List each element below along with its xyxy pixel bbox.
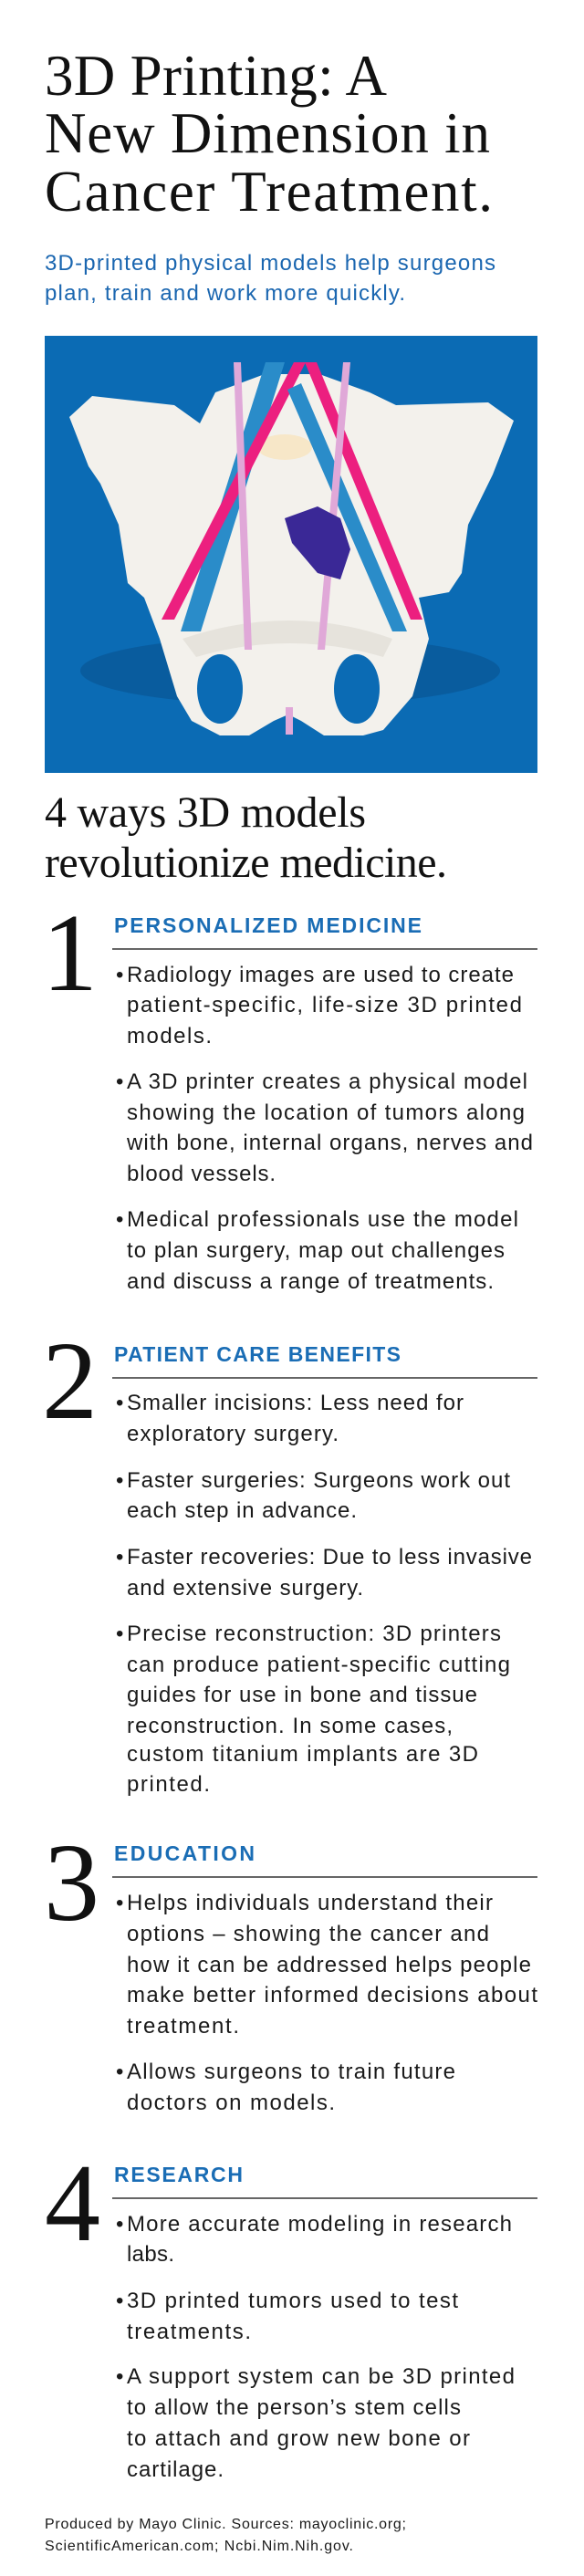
bullets 2: [116, 1391, 532, 1797]
number 4: 4: [45, 2142, 100, 2265]
bullets 1: •: [116, 1207, 123, 1232]
bullets 4: •: [116, 2212, 123, 2237]
footer: sources: ScientificAmerican.com; Ncbi.Nim.Nih.gov.: [45, 2539, 353, 2554]
bullets 2: each step in advance.: [127, 1498, 357, 1523]
subtitle: plan, train and work more quickly.: [45, 281, 405, 306]
bullets 1: A 3D printer creates a physical model: [127, 1069, 527, 1094]
section 2: patient care benefits: [42, 1319, 537, 1797]
bullets 4: treatments.: [127, 2320, 251, 2344]
bullets 2: Faster surgeries: Surgeons work out: [127, 1468, 510, 1493]
bullets 4: to allow the person’s stem cells: [127, 2395, 461, 2420]
number 2: 2: [42, 1319, 98, 1443]
bullets 1: to plan surgery, map out challenges: [127, 1238, 505, 1263]
bullets 2: custom titanium implants are 3D: [127, 1742, 478, 1767]
title: [45, 44, 493, 224]
bullets 4: More accurate modeling in research: [127, 2212, 512, 2237]
bullets 3: how it can be addressed helps people: [127, 1953, 531, 1977]
bullets 2: Faster recoveries: Due to less invasive: [127, 1545, 532, 1570]
bullets 1: Medical professionals use the model: [127, 1207, 518, 1232]
section 4: research: [45, 2142, 537, 2482]
bullets 2: Precise reconstruction: 3D printers: [127, 1622, 501, 1646]
section heading: [45, 788, 447, 887]
bullets 3: Helps individuals understand their: [127, 1891, 493, 1915]
section heading: revolutionize medicine.: [45, 839, 447, 887]
vessels: [181, 362, 285, 631]
bullets 4: •: [116, 2364, 123, 2389]
subtitle: [45, 251, 495, 306]
section 1: personalized medicine: [42, 892, 537, 1294]
section heading: 4 ways 3D models: [45, 788, 366, 837]
bullets 4: 3D printed tumors used to test: [127, 2289, 458, 2313]
bullets 2: reconstruction. In some cases,: [127, 1714, 453, 1738]
bullets 1: and discuss a range of treatments.: [127, 1269, 494, 1294]
bullets 4: to attach and grow new bone or: [127, 2426, 470, 2451]
photo: 3D printed pelvis model: [45, 336, 537, 773]
footer: sources: Produced by Mayo Clinic. Sources: mayoclinic.org;: [45, 2517, 406, 2532]
bullets 2: •: [116, 1391, 123, 1415]
bullets 2: •: [116, 1468, 123, 1493]
bullets 1: •: [116, 1069, 123, 1094]
bullets 1: •: [116, 963, 123, 987]
bullets 2: Smaller incisions: Less need for: [127, 1391, 464, 1415]
bullets 3: make better informed decisions about: [127, 1983, 537, 2008]
bullets 4: [116, 2212, 515, 2482]
bullets 3: doctors on models.: [127, 2091, 335, 2115]
pelvis bone: [69, 374, 514, 735]
title: Cancer Treatment.: [45, 160, 493, 224]
bullets 1: with bone, internal organs, nerves and: [126, 1131, 533, 1155]
bullets 4: A support system can be 3D printed: [127, 2364, 515, 2389]
bullets 1: Radiology images are used to create: [127, 963, 514, 987]
header 2: PATIENT CARE BENEFITS: [114, 1342, 401, 1366]
bullets 2: •: [116, 1622, 123, 1646]
bullets 3: treatment.: [127, 2014, 239, 2039]
bullets 3: [116, 1891, 537, 2115]
section 3: education: [44, 1821, 537, 2115]
bullets 1: showing the location of tumors along: [127, 1100, 525, 1125]
header 4: RESEARCH: [114, 2163, 243, 2186]
bullets 3: options – showing the cancer and: [127, 1922, 489, 1946]
bullets 1: [116, 963, 533, 1294]
bullets 4: labs.: [127, 2242, 174, 2267]
bullets 2: printed.: [127, 1772, 210, 1797]
subtitle: 3D-printed physical models help surgeons: [45, 251, 495, 276]
title: 3D Printing: A: [45, 44, 387, 108]
title: New Dimension in: [45, 101, 490, 165]
bullets 2: and extensive surgery.: [127, 1576, 363, 1601]
bullets 4: •: [116, 2289, 123, 2313]
bullets 2: exploratory surgery.: [127, 1422, 339, 1446]
bullets 1: blood vessels.: [127, 1162, 276, 1186]
bullets 3: •: [116, 2060, 123, 2084]
number 1: 1: [42, 892, 98, 1015]
header 1: PERSONALIZED MEDICINE: [114, 913, 422, 937]
bullets 3: •: [116, 1891, 123, 1915]
bullets 1: models.: [127, 1024, 212, 1048]
bullets 4: cartilage.: [127, 2457, 224, 2482]
bullets 2: guides for use in bone and tissue: [127, 1683, 477, 1707]
footer: sources: [45, 2517, 406, 2554]
bullets 1: patient-specific, life-size 3D printed: [127, 993, 522, 1017]
number 3: 3: [44, 1821, 99, 1945]
header 3: EDUCATION: [114, 1841, 255, 1865]
bullets 3: Allows surgeons to train future: [127, 2060, 455, 2084]
bullets 2: can produce patient-specific cutting: [127, 1653, 510, 1677]
bullets 2: •: [116, 1545, 123, 1570]
